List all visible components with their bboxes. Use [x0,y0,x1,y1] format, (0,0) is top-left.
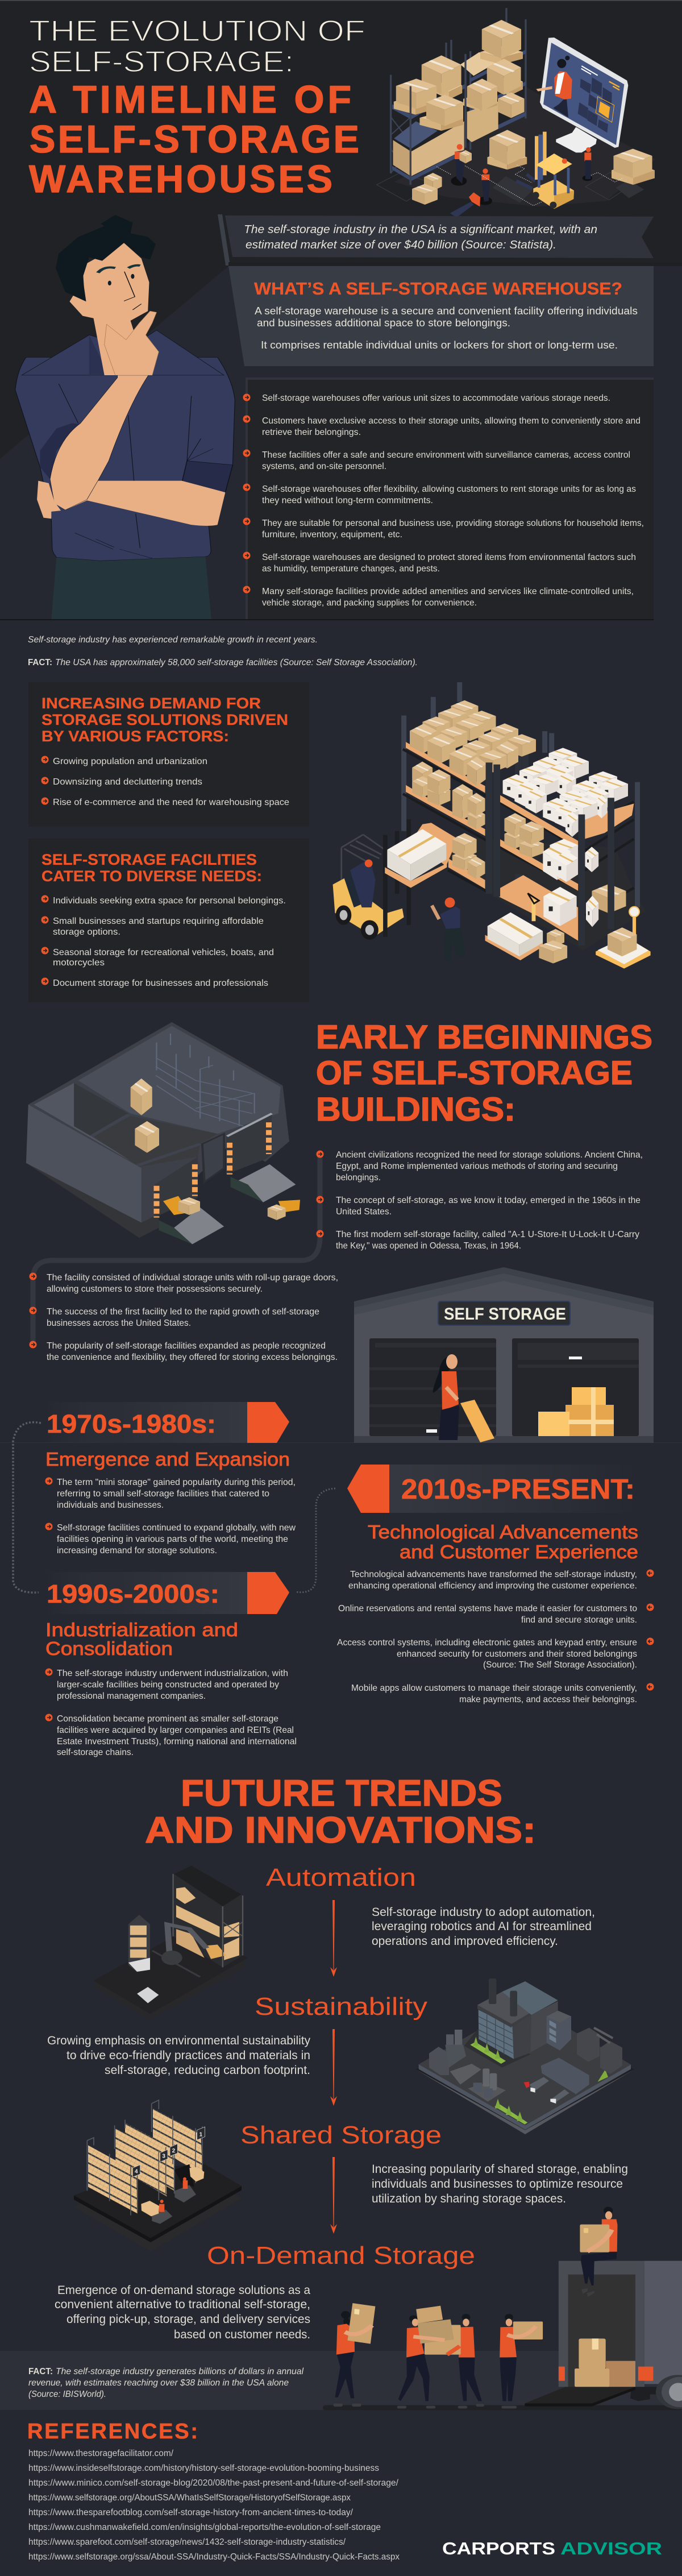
rack number signs: 4 [135,2168,138,2175]
panel: warehouse facts list: furniture, inventory, equipment, etc. [262,530,402,540]
growth statement and fact: The USA has approximately 58,000 self-storage facilities (Source: Self Storage Association). [55,658,418,667]
panel: what is a self-storage warehouse: A self-storage warehouse is a secure and convenient facility offering individuals [255,305,638,317]
panel: diverse needs: storage options. [53,927,120,937]
on-demand text: based on customer needs. [174,2328,310,2341]
illustration: factory [416,1978,634,2134]
rack number signs: 2 [172,2148,176,2154]
growth statement and fact [28,635,418,667]
shared storage text: Increasing popularity of shared storage, enabling [372,2163,628,2176]
on-demand text [55,2284,310,2341]
2010s-present block: enhanced security for customers and their stored belongings [397,1649,637,1659]
banner [45,1402,289,1443]
banner: 1990s-2000s: [47,1579,219,1608]
banner: 1970s-1980s: [47,1409,216,1438]
references list: https://www.selfstorage.org/AboutSSA/WhatIsSelfStorage/HistoryofSelfStorage.aspx [28,2493,351,2503]
1990s-2000s block: facilities were acquired by larger companies and REITs (Real [57,1725,294,1735]
2010s-present block: and Customer Experience [400,1541,638,1562]
early history list: left: businesses across the United States. [47,1318,191,1328]
fact band: (Source: IBISWorld). [28,2390,106,2399]
2010s-present block: Mobile apps allow customers to manage their storage units conveniently, [351,1683,637,1693]
panel: diverse needs: motorcycles [53,958,105,968]
panel: increasing demand: INCREASING DEMAND FOR [41,695,261,712]
banner: 2010s-PRESENT: [401,1474,635,1505]
panel: increasing demand: Rise of e-commerce and the need for warehousing space [53,798,289,807]
early history list: right: the Key," was opened in Odessa, Texas, in 1964. [336,1241,521,1251]
early history list: left [30,1272,338,1362]
2010s-present block: (Source: The Self Storage Association). [483,1660,637,1670]
illustration: automation robot and racks [94,1866,248,2020]
automation text [372,1906,595,1948]
logo [442,2538,662,2558]
1990s-2000s block: Consolidation became prominent as smaller self-storage [57,1714,278,1724]
panel: warehouse facts list: Self-storage warehouses are designed to protect stored items from environmental factors such [262,553,636,562]
growth statement and fact: FACT: [28,658,52,667]
2010s-present block: Online reservations and rental systems have made it easier for customers to [338,1604,637,1613]
rack number signs [132,2127,205,2177]
stacked boxes [538,1387,614,1436]
2010s-present block: Technological advancements have transformed the self-storage industry, [350,1570,637,1579]
dotted connector: right [296,1488,335,1592]
1970s-1980s block: referring to small self-storage facilities that catered to [57,1489,269,1499]
2010s-present block: find and secure storage units. [521,1615,637,1625]
early history list: right [316,1150,643,1251]
on-demand text: offering pick-up, storage, and delivery services [66,2313,310,2326]
heading: future trends: AND INNOVATIONS: [145,1809,536,1851]
sustainability text: to drive eco-friendly practices and materials in [66,2049,310,2062]
sustainability text: self-storage, reducing carbon footprint. [105,2064,310,2077]
automation heading: Automation [266,1864,416,1891]
heading: early beginnings: OF SELF-STORAGE [316,1055,633,1092]
panel: warehouse facts list: Self-storage warehouses offer flexibility, allowing customers to rent storage units for as long as [262,484,636,494]
growth statement and fact: Self-storage industry has experienced remarkable growth in recent years. [28,635,318,645]
illustration: warehouse with monitor and workers [377,8,655,218]
title [29,15,365,201]
early history list: right: belongings. [336,1173,381,1183]
panel: increasing demand: Downsizing and decluttering trends [53,777,202,787]
1970s-1980s block: facilities opening in various parts of the world, meeting the [57,1534,288,1544]
fact band [0,2351,682,2410]
1990s-2000s block: self-storage chains. [57,1748,134,1757]
heading: early beginnings: BUILDINGS: [316,1091,515,1128]
panel: increasing demand [28,682,309,827]
panel: diverse needs: Document storage for businesses and professionals [53,978,268,988]
early history list: right: Egypt, and Rome implemented various methods of storing and securing [336,1162,618,1171]
panel: diverse needs [28,839,309,1002]
panel: what is a self-storage warehouse: WHAT’S A SELF-STORAGE WAREHOUSE? [254,279,622,298]
2010s-present block: enhancing operational efficiency and improving the customer experience. [348,1581,637,1591]
early history list: left: allowing customers to store their possessions securely. [47,1284,263,1294]
1990s-2000s block: Consolidation [45,1638,173,1659]
1990s-2000s block: professional management companies. [57,1691,206,1701]
1970s-1980s block: Emergence and Expansion [45,1449,290,1470]
panel: what is a self-storage warehouse [228,262,682,366]
shared storage text [372,2163,628,2205]
panel: diverse needs: Individuals seeking extra space for personal belongings. [53,896,286,906]
panel: what is a self-storage warehouse: and businesses additional space to store belongings. [257,317,510,329]
references list: https://www.thesparefootblog.com/self-storage-history-from-ancient-times-to-today/ [28,2508,354,2517]
panel: diverse needs: Small businesses and startups requiring affordable [53,916,264,926]
panel: what is a self-storage warehouse: It comprises rentable individual units or lockers for short or long-term use. [261,339,618,351]
illustration: delivery workers and truck [323,2207,682,2410]
shared storage heading: Shared Storage [240,2121,442,2149]
panel: diverse needs: SELF-STORAGE FACILITIES [41,851,257,868]
panel: warehouse facts list: systems, and on-site personnel. [262,462,386,471]
vehicles with drivers [141,2167,204,2224]
monitor [536,38,628,152]
banner [347,1465,637,1513]
1970s-1980s block: individuals and businesses. [57,1500,164,1510]
panel: diverse needs: Seasonal storage for recreational vehicles, boats, and [53,948,274,957]
references list: https://www.minico.com/self-storage-blog/2020/08/the-past-present-and-future-of-self-storage/ [28,2478,399,2488]
rack number signs: 3 [162,2153,165,2159]
panel: market size banner [218,214,654,266]
1990s-2000s block: Estate Investment Trusts), forming national and international [57,1737,297,1747]
1970s-1980s block [45,1402,296,1555]
panel: warehouse facts list: retrieve their belongings. [262,428,361,437]
title: SELF-STORAGE: [29,45,294,78]
title: SELF-STORAGE [30,118,359,161]
worker with tall box [334,2303,375,2407]
panel: warehouse facts list: They are suitable for personal and business use, providing storage solutions for household items, [262,518,644,528]
heading: early beginnings [316,1019,652,1128]
fact band: FACT: [28,2367,53,2376]
pallet truck handle [528,893,539,921]
early history list: left: The facility consisted of individual storage units with roll-up garage doors, [47,1273,338,1283]
references heading: REFERENCES: [27,2420,198,2444]
references list [28,2449,400,2562]
scale with box [596,907,651,969]
automation text: Self-storage industry to adopt automation, [372,1906,595,1919]
2010s-present block [337,1465,654,1704]
automation text: leveraging robotics and AI for streamlined [372,1920,592,1933]
illustration: self storage building [0,1267,682,1443]
panel: diverse needs: CATER TO DIVERSE NEEDS: [41,868,262,885]
timeline connector [33,1154,320,1345]
panel: warehouse facts list: Many self-storage facilities provide added amenities and services like climate-controlled units, [262,587,634,596]
pair with stacked boxes [397,2306,484,2408]
on-demand heading: On-Demand Storage [207,2242,475,2270]
references list: https://www.thestoragefacilitator.com/ [28,2449,174,2458]
references list: https://www.sparefoot.com/self-storage/news/1432-self-storage-industry-statistics/ [28,2537,346,2547]
panel: increasing demand: BY VARIOUS FACTORS: [41,728,229,745]
panel: warehouse facts list: These facilities offer a safe and secure environment with surveillance cameras, access control [262,450,630,460]
forklift [516,132,574,209]
forklift with driver [333,819,409,940]
panel: warehouse facts list: as humidity, temperature changes, and pests. [262,564,440,574]
1970s-1980s block: The term "mini storage" gained popularity during this period, [57,1478,296,1487]
worker [432,898,465,961]
panel: increasing demand: Growing population and urbanization [53,757,207,766]
shared storage text: individuals and businesses to optimize resource [372,2177,623,2191]
white pallet on forks [385,829,447,888]
illustration: warehouse racks with forklift [333,682,651,969]
sustainability text [47,2034,310,2077]
sustainability heading: Sustainability [255,1993,427,2021]
automation text: operations and improved efficiency. [372,1935,558,1948]
small pallet and boxes [485,912,567,964]
title: A TIMELINE OF [29,78,351,121]
early history list: left: the convenience and flexibility, they offered for storing excess belongings. [47,1353,338,1362]
references list: https://www.insideselfstorage.com/history/history-self-storage-evolution-booming-business [28,2463,379,2473]
arrow [330,2157,337,2234]
early history list: right: Ancient civilizations recognized the need for storage solutions. Ancient China, [336,1150,643,1160]
heading: future trends [145,1772,536,1851]
worker sitting on truck [580,2207,618,2297]
fact band: revenue, with estimates reaching over $38 billion in the USA alone [28,2378,289,2388]
1970s-1980s block: Self-storage facilities continued to expand globally, with new [57,1523,296,1533]
panel: market size banner: estimated market size of over $40 billion (Source: Statista). [246,239,556,251]
panel: warehouse facts list: vehicle storage, and packing supplies for convenience. [262,598,477,608]
on-demand text: convenient alternative to traditional self-storage, [55,2298,310,2311]
on-demand text: Emergence of on-demand storage solutions as a [57,2284,310,2297]
sign: SELF STORAGE [444,1305,566,1324]
arrow [330,1900,337,1977]
early history list: left: The popularity of self-storage facilities expanded as people recognized [47,1341,326,1351]
panel: warehouse facts list: Customers have exclusive access to their storage units, allowing them to conveniently store and [262,416,641,426]
banner [45,1572,289,1614]
sustainability text: Growing emphasis on environmental sustainability [47,2034,310,2047]
early history list: right: United States. [336,1207,392,1217]
logo: CARPORTS [442,2538,555,2558]
early history list: left: The success of the first facility led to the rapid growth of self-storage [47,1307,319,1317]
panel: market size banner: The self-storage industry in the USA is a significant market, with an [244,223,597,236]
dotted connector: left [13,1422,41,1592]
2010s-present block: make payments, and access their belongings. [459,1695,637,1704]
worker with box [500,2314,543,2408]
illustration: thinking man [15,215,235,620]
panel: warehouse facts list: they need without long-term commitments. [262,496,433,505]
shared storage text: utilization by sharing storage spaces. [372,2192,566,2205]
1970s-1980s block: increasing demand for storage solutions. [57,1546,217,1555]
1990s-2000s block: Industrialization and [45,1619,238,1640]
1990s-2000s block [45,1572,297,1757]
heading: future trends: FUTURE TRENDS [181,1772,502,1814]
illustration: shared storage racks [74,2100,242,2251]
references list: https://www.selfstorage.org/ssa/About-SSA/Industry-Quick-Facts/SSA/Industry-Quick-Facts.aspx [28,2552,400,2562]
panel: warehouse facts list [0,378,654,620]
woman with cart [426,1354,494,1442]
early history list: right: The first modern self-storage facility, called "A-1 U-Store-It U-Lock-It U-Carry [336,1230,639,1239]
rack number signs: 1 [199,2131,203,2138]
early history list: right: The concept of self-storage, as we know it today, emerged in the 1960s in the [336,1196,641,1205]
workers [450,144,592,218]
2010s-present block: Technological Advancements [368,1521,638,1542]
illustration: storage building floor plan [26,1022,300,1244]
heading: early beginnings: EARLY BEGINNINGS [316,1019,652,1056]
1990s-2000s block: The self-storage industry underwent industrialization, with [57,1669,288,1678]
arrow [330,2029,337,2106]
title: WAREHOUSES [29,157,332,201]
title: THE EVOLUTION OF [29,15,365,48]
panel: warehouse facts list: Self-storage warehouses offer various unit sizes to accommodate various storage needs. [262,393,610,403]
1990s-2000s block: larger-scale facilities being constructed and operated by [57,1680,279,1690]
references list: https://www.cushmanwakefield.com/en/insights/global-reports/the-evolution-of-self-storage [28,2523,381,2532]
2010s-present block: Access control systems, including electronic gates and keypad entry, ensure [337,1638,637,1648]
fact band: The self-storage industry generates billions of dollars in annual [56,2367,303,2376]
logo: ADVISOR [560,2538,662,2558]
panel: increasing demand: STORAGE SOLUTIONS DRIVEN [41,711,288,728]
